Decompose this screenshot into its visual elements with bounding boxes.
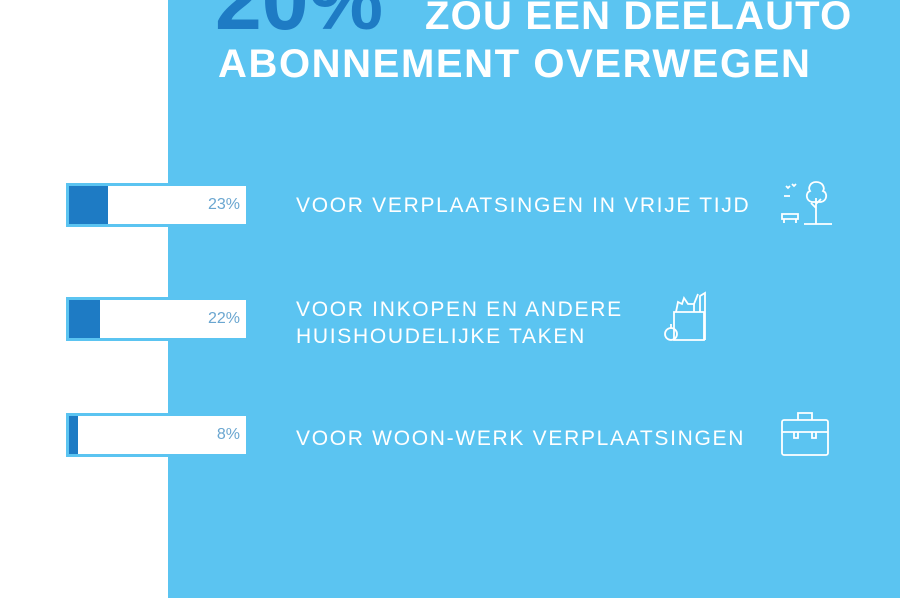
bar: 22%: 22% bbox=[208, 310, 240, 327]
icon: grocery bag bbox=[664, 292, 706, 341]
label: inkopen bbox=[296, 298, 623, 348]
title line 2: ABONNEMENT OVERWEGEN bbox=[218, 42, 812, 86]
bar: 22% bbox=[66, 297, 249, 341]
label: inkopen: HUISHOUDELIJKE TAKEN bbox=[296, 325, 586, 348]
bar: 8%: 8% bbox=[217, 426, 240, 443]
bar: 23%: 23% bbox=[208, 196, 240, 213]
bar: 23% bbox=[66, 183, 249, 227]
title bbox=[215, 0, 852, 86]
label: woon-werk: VOOR WOON-WERK VERPLAATSINGEN bbox=[296, 427, 745, 450]
label: inkopen: VOOR INKOPEN EN ANDERE bbox=[296, 298, 623, 321]
icon: briefcase bbox=[781, 412, 829, 456]
label: vrije tijd: VOOR VERPLAATSINGEN IN VRIJE TIJD bbox=[296, 194, 750, 217]
bar: 8% bbox=[66, 413, 249, 457]
icon: park tree bench bbox=[781, 181, 832, 225]
